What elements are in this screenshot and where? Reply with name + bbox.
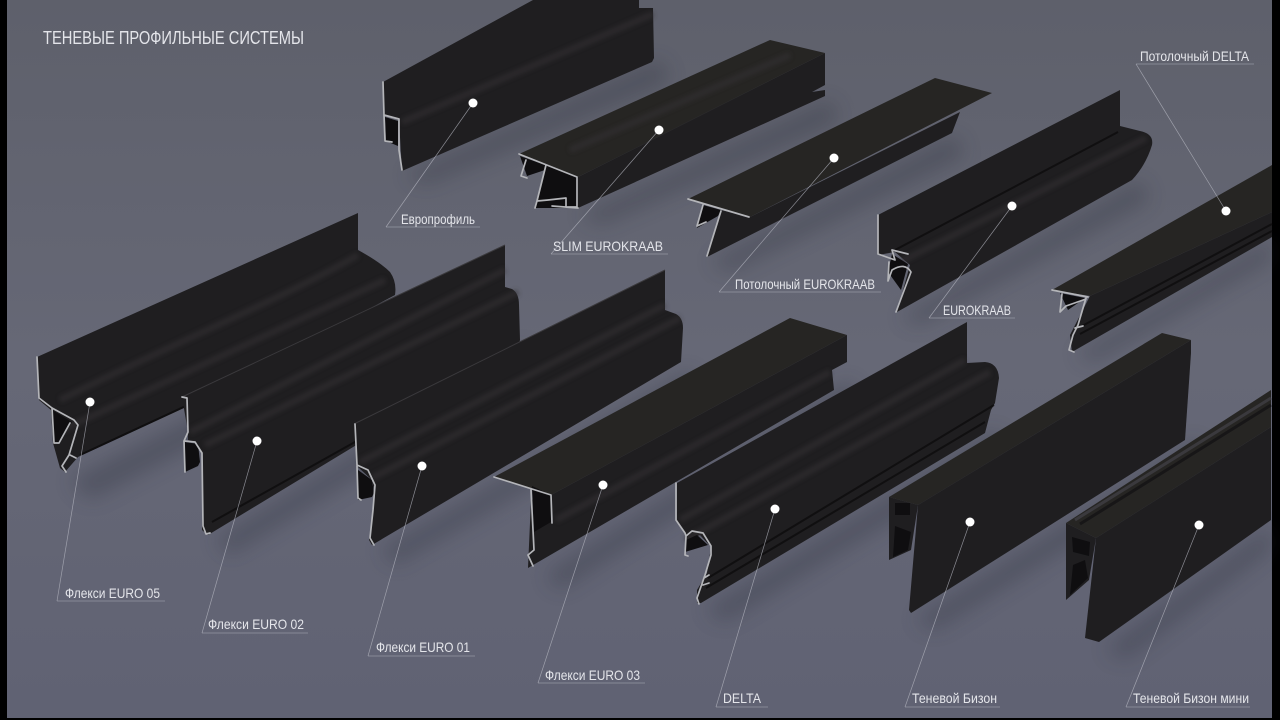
profile: Флекси EURO 03 — [494, 318, 847, 568]
callout: Потолочный EUROKRAAB — [719, 154, 881, 292]
profile: Потолочный EUROKRAAB — [688, 78, 992, 257]
callout: EUROKRAAB — [929, 202, 1016, 318]
profile: Теневой Бизон мини — [1066, 390, 1271, 642]
title: ТЕНЕВЫЕ ПРОФИЛЬНЫЕ СИСТЕМЫ — [43, 28, 304, 48]
profile: Флекси EURO 02 — [182, 245, 520, 535]
callout: Европрофиль — [386, 98, 480, 227]
profile: DELTA — [676, 322, 999, 604]
callout: Теневой Бизон — [905, 518, 1000, 707]
callout: Европрофиль: Европрофиль — [401, 211, 475, 227]
callout: Потолочный EUROKRAAB: Потолочный EUROKRAAB — [735, 276, 875, 292]
callout: Потолочный DELTA: Потолочный DELTA — [1140, 48, 1250, 64]
profile: Потолочный DELTA — [1052, 165, 1272, 352]
callout: Флекси EURO 05 — [57, 398, 165, 601]
profile: Флекси EURO 01 — [354, 270, 683, 545]
callout: Флекси EURO 03: Флекси EURO 03 — [545, 667, 640, 683]
profile: SLIM EUROKRAAB — [519, 40, 825, 208]
callout: Потолочный DELTA — [1136, 48, 1254, 216]
callout: Теневой Бизон мини — [1126, 520, 1250, 707]
callout: Флекси EURO 05: Флекси EURO 05 — [65, 585, 160, 601]
callout: Флекси EURO 02: Флекси EURO 02 — [208, 616, 304, 632]
callout: SLIM EUROKRAAB — [551, 126, 668, 254]
callout: Флекси EURO 02 — [202, 436, 308, 633]
profile: EUROKRAAB — [878, 90, 1152, 312]
callout: DELTA: DELTA — [723, 690, 762, 706]
callout: Флекси EURO 01 — [368, 462, 475, 656]
profile: Теневой Бизон — [889, 333, 1191, 613]
profile: Флекси EURO 05 — [37, 213, 395, 472]
callout: Теневой Бизон: Теневой Бизон — [912, 690, 997, 706]
callout: DELTA — [716, 504, 780, 707]
callout: Флекси EURO 01: Флекси EURO 01 — [376, 639, 470, 655]
callout: Теневой Бизон мини: Теневой Бизон мини — [1133, 690, 1249, 706]
callout: SLIM EUROKRAAB: SLIM EUROKRAAB — [553, 238, 663, 254]
profile: Европрофиль — [383, 0, 654, 171]
callout: EUROKRAAB: EUROKRAAB — [943, 302, 1011, 318]
callout: Флекси EURO 03 — [538, 480, 645, 683]
